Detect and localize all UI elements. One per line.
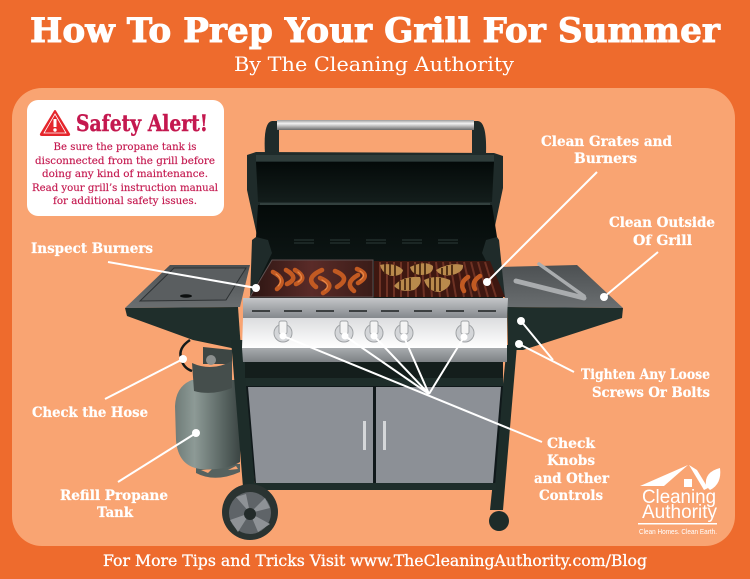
hood lid <box>247 152 503 240</box>
grill body interior <box>250 205 505 298</box>
text: safety message: for additional safety issues. <box>53 195 197 207</box>
handle <box>265 120 486 154</box>
callout: check knobs <box>280 332 610 504</box>
legs <box>231 340 517 510</box>
title: How To Prep Your Grill For Summer <box>30 11 721 51</box>
heading: safety alert: Safety Alert! <box>76 111 208 137</box>
callout: tighten screws: Tighten Any Loose <box>581 367 710 383</box>
logo: the cleaning authority <box>638 465 720 536</box>
callout: check knobs: Controls <box>539 488 603 504</box>
callout: check knobs: and Other <box>534 471 610 487</box>
callout: refill propane tank: Tank <box>97 505 133 521</box>
callout: clean outside of grill: Clean Outside <box>609 215 715 231</box>
left side shelf <box>125 265 250 350</box>
panel: main <box>12 88 735 546</box>
text: safety message: Be sure the propane tank is <box>54 141 196 153</box>
text: safety message <box>32 141 219 207</box>
callout: clean grates and burners: Burners <box>574 151 637 167</box>
right side shelf <box>498 265 623 350</box>
cabinet <box>245 362 503 490</box>
callout: check knobs: Check <box>547 436 595 452</box>
griddle with sausages <box>250 260 373 297</box>
knobs <box>274 321 474 342</box>
text: safety message: Read your grill’s instruction manual <box>32 182 219 194</box>
callout: clean grates and burners <box>483 134 672 286</box>
callout: clean outside of grill <box>600 215 715 301</box>
callout: clean grates and burners: Clean Grates and <box>541 134 672 150</box>
grate with steaks <box>374 261 505 297</box>
callout: clean outside of grill: Of Grill <box>633 233 692 249</box>
propane tank <box>175 340 240 478</box>
tongs <box>516 264 584 298</box>
text: safety message: disconnected from the grill before <box>35 155 215 167</box>
callout: check the hose <box>32 355 187 421</box>
callout: refill propane tank: Refill Propane <box>60 488 168 504</box>
panel: safety alert <box>27 100 224 216</box>
foot <box>489 511 509 531</box>
logo: the cleaning authority: Clean Homes. Clean Earth. <box>639 527 717 536</box>
callout: check knobs: Knobs <box>547 453 595 469</box>
callout: tighten screws: Screws Or Bolts <box>592 385 710 401</box>
callout: check the hose: Check the Hose <box>32 405 148 421</box>
text: safety message: doing any kind of maintenance. <box>42 168 208 180</box>
logo: the cleaning authority: Authority <box>642 502 717 523</box>
illustration: grill <box>125 120 623 540</box>
callout: inspect burners: Inspect Burners <box>31 241 153 257</box>
control panel <box>242 298 508 362</box>
callout: inspect burners <box>31 241 260 292</box>
icon: warning triangle <box>41 111 69 135</box>
callout: tighten screws <box>515 317 710 401</box>
logo: the cleaning authority: Cleaning <box>642 487 716 508</box>
footer: For More Tips and Tricks Visit www.TheCleaningAuthority.com/Blog <box>103 551 647 570</box>
callout: refill propane tank <box>60 429 200 521</box>
subtitle: By The Cleaning Authority <box>234 52 515 76</box>
wheel <box>222 484 278 540</box>
